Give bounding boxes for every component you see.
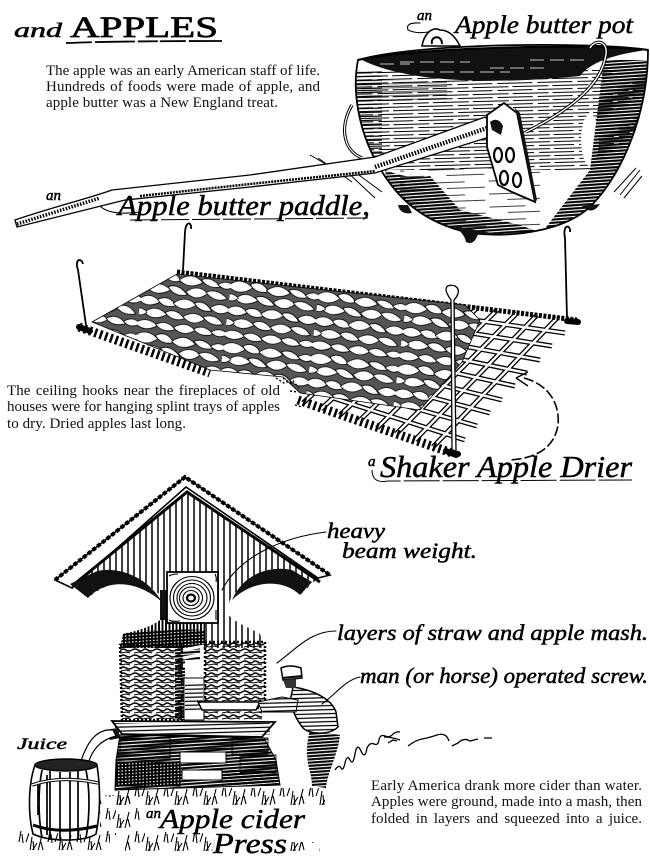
trough <box>112 721 275 737</box>
man at the screw <box>258 666 340 788</box>
label: an apple butter paddle <box>46 188 370 222</box>
scribble: ground line <box>335 732 492 770</box>
label: a shaker apple drier: a <box>368 454 376 470</box>
title <box>14 11 222 44</box>
brackets <box>70 570 162 602</box>
pot bail handle <box>526 42 606 132</box>
text block: early america cider: Apples were ground, made into a mash, then <box>371 794 642 810</box>
label: an apple butter paddle: an <box>46 188 61 204</box>
label: man or horse operated screw: man (or horse) operated screw. <box>360 663 648 688</box>
pot feet <box>398 204 600 243</box>
label: heavy beam weight <box>327 518 477 563</box>
ceiling hooks <box>77 260 86 325</box>
text block: apple staff of life: The apple was an early American staff of life. <box>46 63 320 79</box>
leader lines <box>222 532 360 704</box>
text block: early america cider: Early America drank more cider than water. <box>371 778 642 794</box>
illustration: shaker apple drier <box>77 223 578 455</box>
label: an apple butter pot: Apple butter pot <box>453 12 634 39</box>
text block: apple staff of life <box>46 63 320 111</box>
tower <box>120 612 205 648</box>
label: an apple butter pot <box>408 8 634 39</box>
drier tray <box>303 301 565 447</box>
label: an apple butter pot: an <box>417 8 432 24</box>
text block: ceiling hooks: houses were for hanging splint trays of apples <box>7 399 280 415</box>
beam weight <box>167 572 218 623</box>
label: an apple cider press: Press <box>212 828 287 860</box>
text block: ceiling hooks: The ceiling hooks near the fireplaces of old <box>7 383 280 399</box>
barrel <box>29 765 100 840</box>
arrow: drier label to tray <box>510 372 558 460</box>
illustration: apple cider press <box>18 477 340 852</box>
label: juice: Juice <box>17 736 67 753</box>
label: heavy beam weight: beam weight. <box>342 538 477 563</box>
title: APPLES <box>70 11 218 44</box>
grass <box>115 788 325 808</box>
label: an apple butter paddle: Apple butter paddle, <box>116 191 370 222</box>
label: heavy beam weight: heavy <box>327 518 385 543</box>
illustration: apple butter paddle <box>15 103 537 227</box>
text block: apple staff of life: apple butter was a New England treat. <box>46 95 278 111</box>
juice spout <box>104 728 120 740</box>
label: a shaker apple drier: Shaker Apple Drier <box>380 449 633 484</box>
title: and <box>14 20 64 42</box>
text block: apple staff of life: Hundreds of foods were made of apple, and <box>46 79 320 95</box>
label: an apple cider press: Apple cider <box>158 804 306 834</box>
text block: early america cider <box>371 778 642 827</box>
illustration: apple butter pot <box>310 29 650 243</box>
screw plate <box>198 702 260 710</box>
paddle blade <box>487 103 535 202</box>
text block: early america cider: folded in layers and squeezed into a juice. <box>371 811 642 827</box>
text block: ceiling hooks: to dry. Dried apples last long. <box>7 416 186 432</box>
press roof and gable <box>70 492 318 612</box>
label: layers of straw and apple mash: layers of straw and apple mash. <box>337 620 648 645</box>
label: an apple cider press <box>146 804 306 860</box>
label: an apple cider press: an <box>146 806 161 822</box>
pot interior <box>362 46 646 81</box>
dried apple slices <box>92 274 480 410</box>
layers of straw <box>120 645 182 720</box>
stone base <box>115 735 280 790</box>
text block: ceiling hooks <box>7 383 280 432</box>
